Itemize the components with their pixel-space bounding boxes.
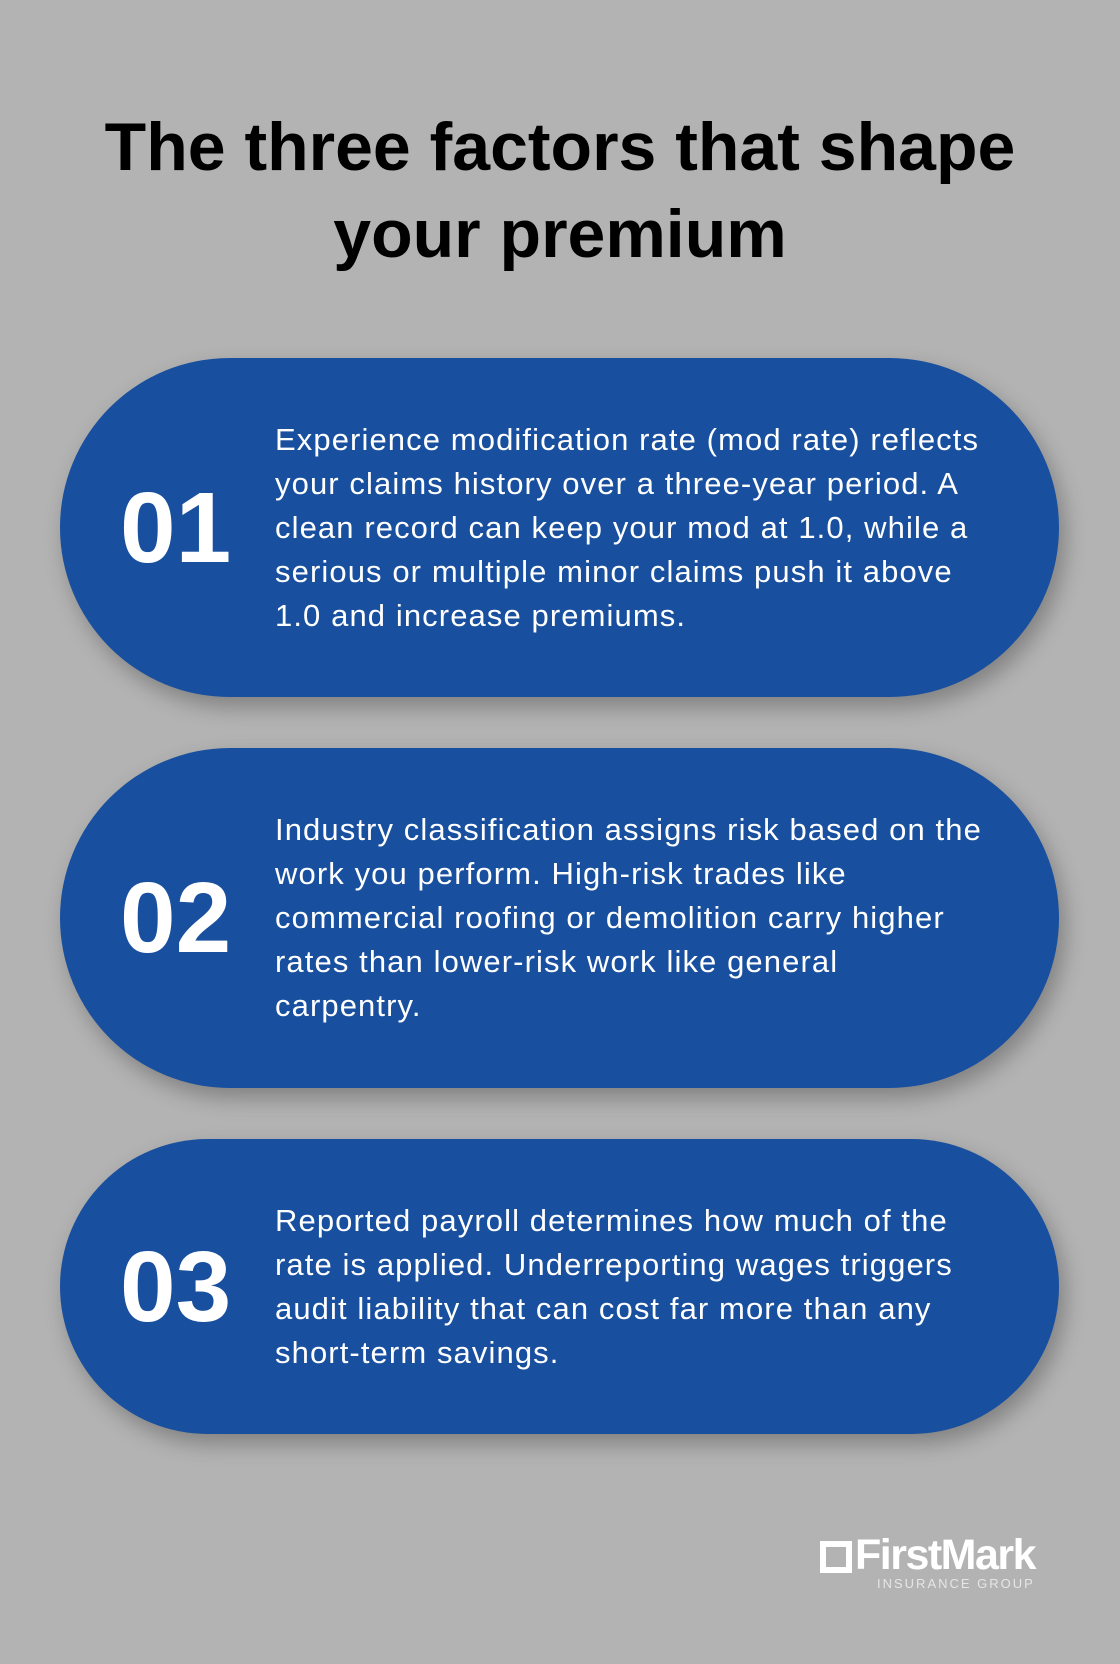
text 01: 1.0 and increase premiums. (275, 598, 686, 633)
number 01: 01 (120, 472, 231, 584)
title: your premium (333, 196, 787, 272)
text 01: serious or multiple minor claims push it above (275, 554, 953, 589)
text 01: Experience modification rate (mod rate) reflects (275, 422, 979, 457)
title: The three factors that shape (105, 109, 1015, 185)
logo wordmark: FirstMark (855, 1531, 1035, 1579)
title (105, 109, 1015, 272)
text 02: commercial roofing or demolition carry higher (275, 900, 945, 935)
icon: logo square (820, 1541, 852, 1573)
logo (820, 1531, 1036, 1591)
text 03: short-term savings. (275, 1335, 559, 1370)
text 02 (275, 812, 982, 1023)
panel: factor 03 (60, 1139, 1059, 1434)
panel: factor 02 (60, 748, 1059, 1088)
text 01 (275, 422, 979, 633)
text 03: rate is applied. Underreporting wages triggers (275, 1247, 953, 1282)
text 01: your claims history over a three-year period. A (275, 466, 959, 501)
text 02: Industry classification assigns risk based on the (275, 812, 982, 847)
text 02: work you perform. High-risk trades like (275, 856, 847, 891)
text 03: audit liability that can cost far more than any (275, 1291, 932, 1326)
text 02: carpentry. (275, 988, 422, 1023)
number 03: 03 (120, 1231, 231, 1343)
text 03: Reported payroll determines how much of the (275, 1203, 948, 1238)
panel: factor 01 (60, 358, 1059, 697)
text 02: rates than lower-risk work like general (275, 944, 838, 979)
text 01: clean record can keep your mod at 1.0, while a (275, 510, 968, 545)
text 03 (275, 1203, 953, 1370)
number 02: 02 (120, 862, 231, 974)
logo subtitle: INSURANCE GROUP (877, 1576, 1035, 1591)
